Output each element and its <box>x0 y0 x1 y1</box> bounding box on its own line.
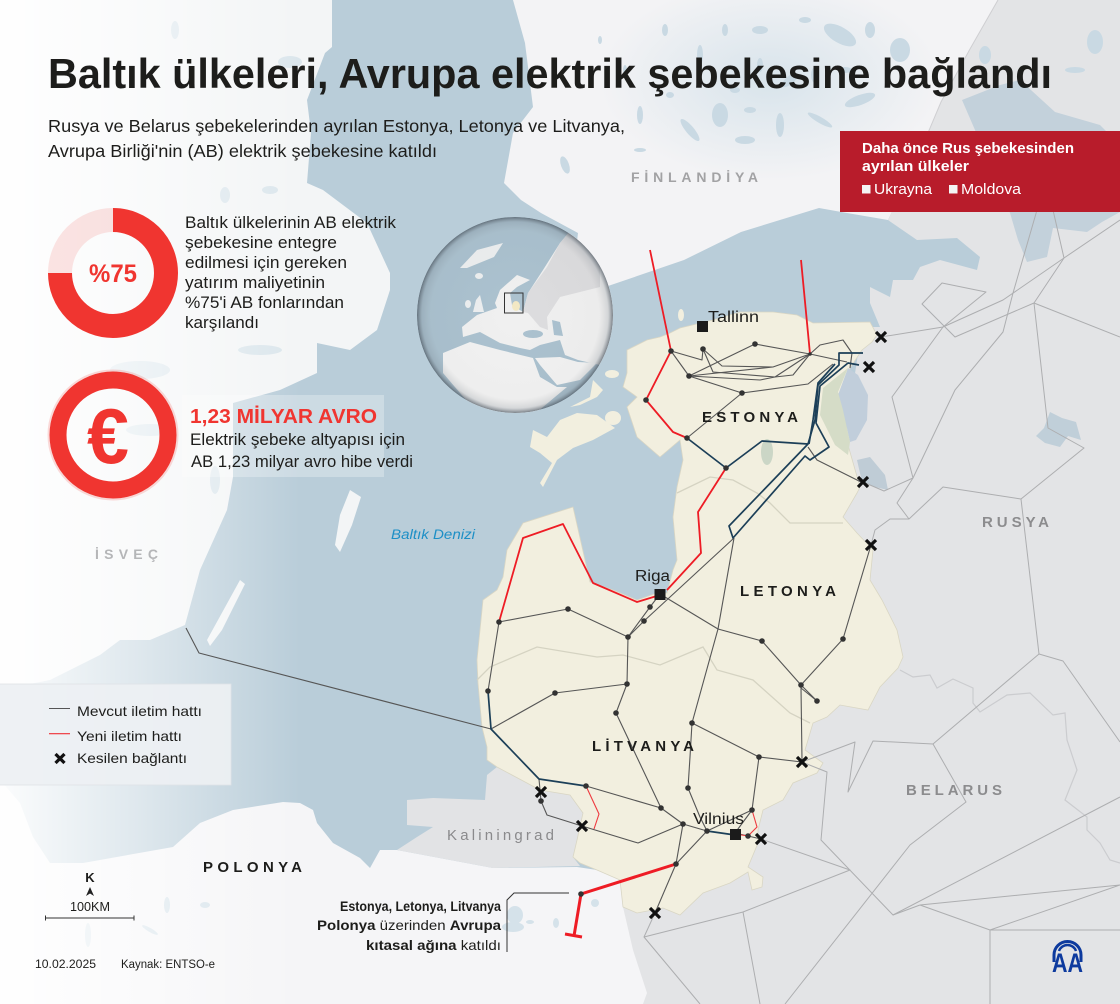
map: transmission network <box>186 250 886 937</box>
north arrow and scale bar: K <box>85 870 95 885</box>
map: Sweden lakes <box>110 21 302 494</box>
country labels: BELARUS <box>906 782 1002 799</box>
country labels: LETONYA <box>740 583 836 600</box>
date: 10.02.2025 <box>35 959 96 971</box>
country labels <box>95 169 1049 876</box>
globe Arabia <box>535 357 597 385</box>
city labels: Riga <box>635 568 670 585</box>
country labels: LİTVANYA <box>592 738 694 755</box>
panel: countries already separated <box>840 131 1120 212</box>
text: EU funding share: yatırım maliyetinin <box>185 274 325 292</box>
globe sphere shading <box>417 217 613 413</box>
donut chart: 75 percent <box>60 220 166 326</box>
text: EU funding share: edilmesi için gereken <box>185 254 347 272</box>
panel: grant text: AB 1,23 milyar avro hibe verdi <box>191 453 413 471</box>
cut connection markers <box>536 332 886 918</box>
callout: Poland connection: Estonya, Letonya, Litvanya <box>340 898 501 914</box>
callout: Poland connection <box>317 893 569 953</box>
callout: Poland connection: Polonya üzerinden Avrupa <box>317 917 501 933</box>
map: Lake Vortsjarv <box>761 439 773 465</box>
legend: Mevcut iletim hattı <box>77 703 202 719</box>
Baltic Sea label: Baltık Denizi <box>391 527 476 542</box>
map: Estonia wetlands <box>820 368 850 455</box>
map: Gotland and Oland islands <box>207 490 361 646</box>
city markers <box>654 321 741 840</box>
map: Saaremaa island <box>530 413 615 487</box>
subtitle: Avrupa Birliği'nin (AB) elektrik şebekesine katıldı <box>48 141 437 161</box>
city labels: Tallinn <box>708 309 759 326</box>
HVDC dark lines <box>488 353 863 835</box>
title: Baltık ülkeleri, Avrupa elektrik şebekesine bağlandı <box>48 50 1052 97</box>
icon: euro coin: € <box>87 392 129 480</box>
text: EU funding share: şebekesine entegre <box>185 234 337 252</box>
map: Lake Ilmen <box>1036 412 1081 447</box>
country labels: İSVEÇ <box>95 546 158 562</box>
donut chart: 75 percent: %75 <box>89 260 137 288</box>
panel: countries already separated: Ukrayna <box>874 181 933 198</box>
panel: grant text: 1,23 MİLYAR AVRO <box>190 405 377 428</box>
globe Eurasia land <box>462 225 620 365</box>
Kaliningrad label: Kaliningrad <box>447 827 554 844</box>
new lines <box>499 250 810 622</box>
logo: AA: AA <box>1052 948 1083 978</box>
country labels: FİNLANDİYA <box>631 169 758 185</box>
map: Finland Russia border <box>917 0 998 159</box>
panel: countries already separated: ayrılan ülkeler <box>862 159 969 175</box>
logo: AA <box>1052 941 1083 978</box>
existing lines: Estonia <box>671 340 863 483</box>
globe focus box <box>504 293 523 313</box>
country labels: ESTONYA <box>702 409 798 426</box>
map: Kaliningrad land <box>397 767 583 868</box>
thin new lines <box>586 786 757 836</box>
map: Russia and Belarus land <box>600 0 1120 1004</box>
country labels: POLONYA <box>203 859 302 876</box>
globe <box>417 217 620 420</box>
map: Lake Peipus <box>838 368 868 442</box>
existing lines: Latvia and Lithuania <box>186 538 871 913</box>
legend: Yeni iletim hattı <box>77 728 182 744</box>
map: Baltic internal borders <box>477 477 843 723</box>
globe ocean <box>419 219 600 406</box>
country labels: RUSYA <box>982 514 1049 531</box>
map: Finland lake district tint <box>600 0 940 180</box>
map: Finland lakes <box>558 17 1103 175</box>
legend <box>0 684 231 785</box>
panel: grant text: Elektrik şebeke altyapısı için <box>190 431 405 449</box>
globe Africa <box>443 342 567 420</box>
text: EU funding share: karşılandı <box>185 314 259 332</box>
map: Pskov lake <box>857 457 888 490</box>
map: Poland land <box>0 780 647 1004</box>
legend: Kesilen bağlantı <box>77 750 187 766</box>
map: Sweden land <box>0 0 390 690</box>
source: Kaynak: ENTSO-e <box>121 959 215 971</box>
north arrow and scale bar: 100KM <box>70 900 110 914</box>
callout: Poland connection: kıtasal ağına katıldı <box>366 937 501 953</box>
panel: grant text <box>182 395 413 477</box>
text: EU funding share <box>185 214 397 332</box>
globe Greenland, Iceland and Britain <box>460 243 503 312</box>
subtitle: Rusya ve Belarus şebekelerinden ayrılan Estonya, Letonya ve Litvanya, <box>48 116 625 136</box>
network nodes <box>485 341 846 897</box>
city labels: Vilnius <box>693 811 744 828</box>
map: Baltic states land <box>477 312 903 915</box>
panel: countries already separated: Daha önce Rus şebekesinden <box>862 141 1074 157</box>
grid lines outside Baltics <box>644 210 1120 1004</box>
text: EU funding share: Baltık ülkelerinin AB elektrik <box>185 214 397 232</box>
city labels <box>635 309 759 828</box>
globe Russia <box>523 225 600 330</box>
left white fade <box>0 0 300 1004</box>
Poland link thick red <box>565 864 676 937</box>
map: Poland lakes <box>85 897 599 947</box>
globe Black Sea and Caspian <box>523 320 563 338</box>
subtitle <box>48 116 625 161</box>
north arrow and scale bar <box>46 870 134 920</box>
map: Belarus Russia border <box>900 670 1120 863</box>
icon: euro coin <box>48 370 178 500</box>
map: Finland land <box>504 0 998 300</box>
map: Lake Ladoga <box>962 80 1120 262</box>
text: EU funding share: %75'i AB fonlarından <box>185 294 344 312</box>
globe Baltic states highlight <box>512 301 520 311</box>
panel: countries already separated: Moldova <box>961 181 1022 198</box>
map: Hiiumaa and small islands <box>570 309 684 425</box>
